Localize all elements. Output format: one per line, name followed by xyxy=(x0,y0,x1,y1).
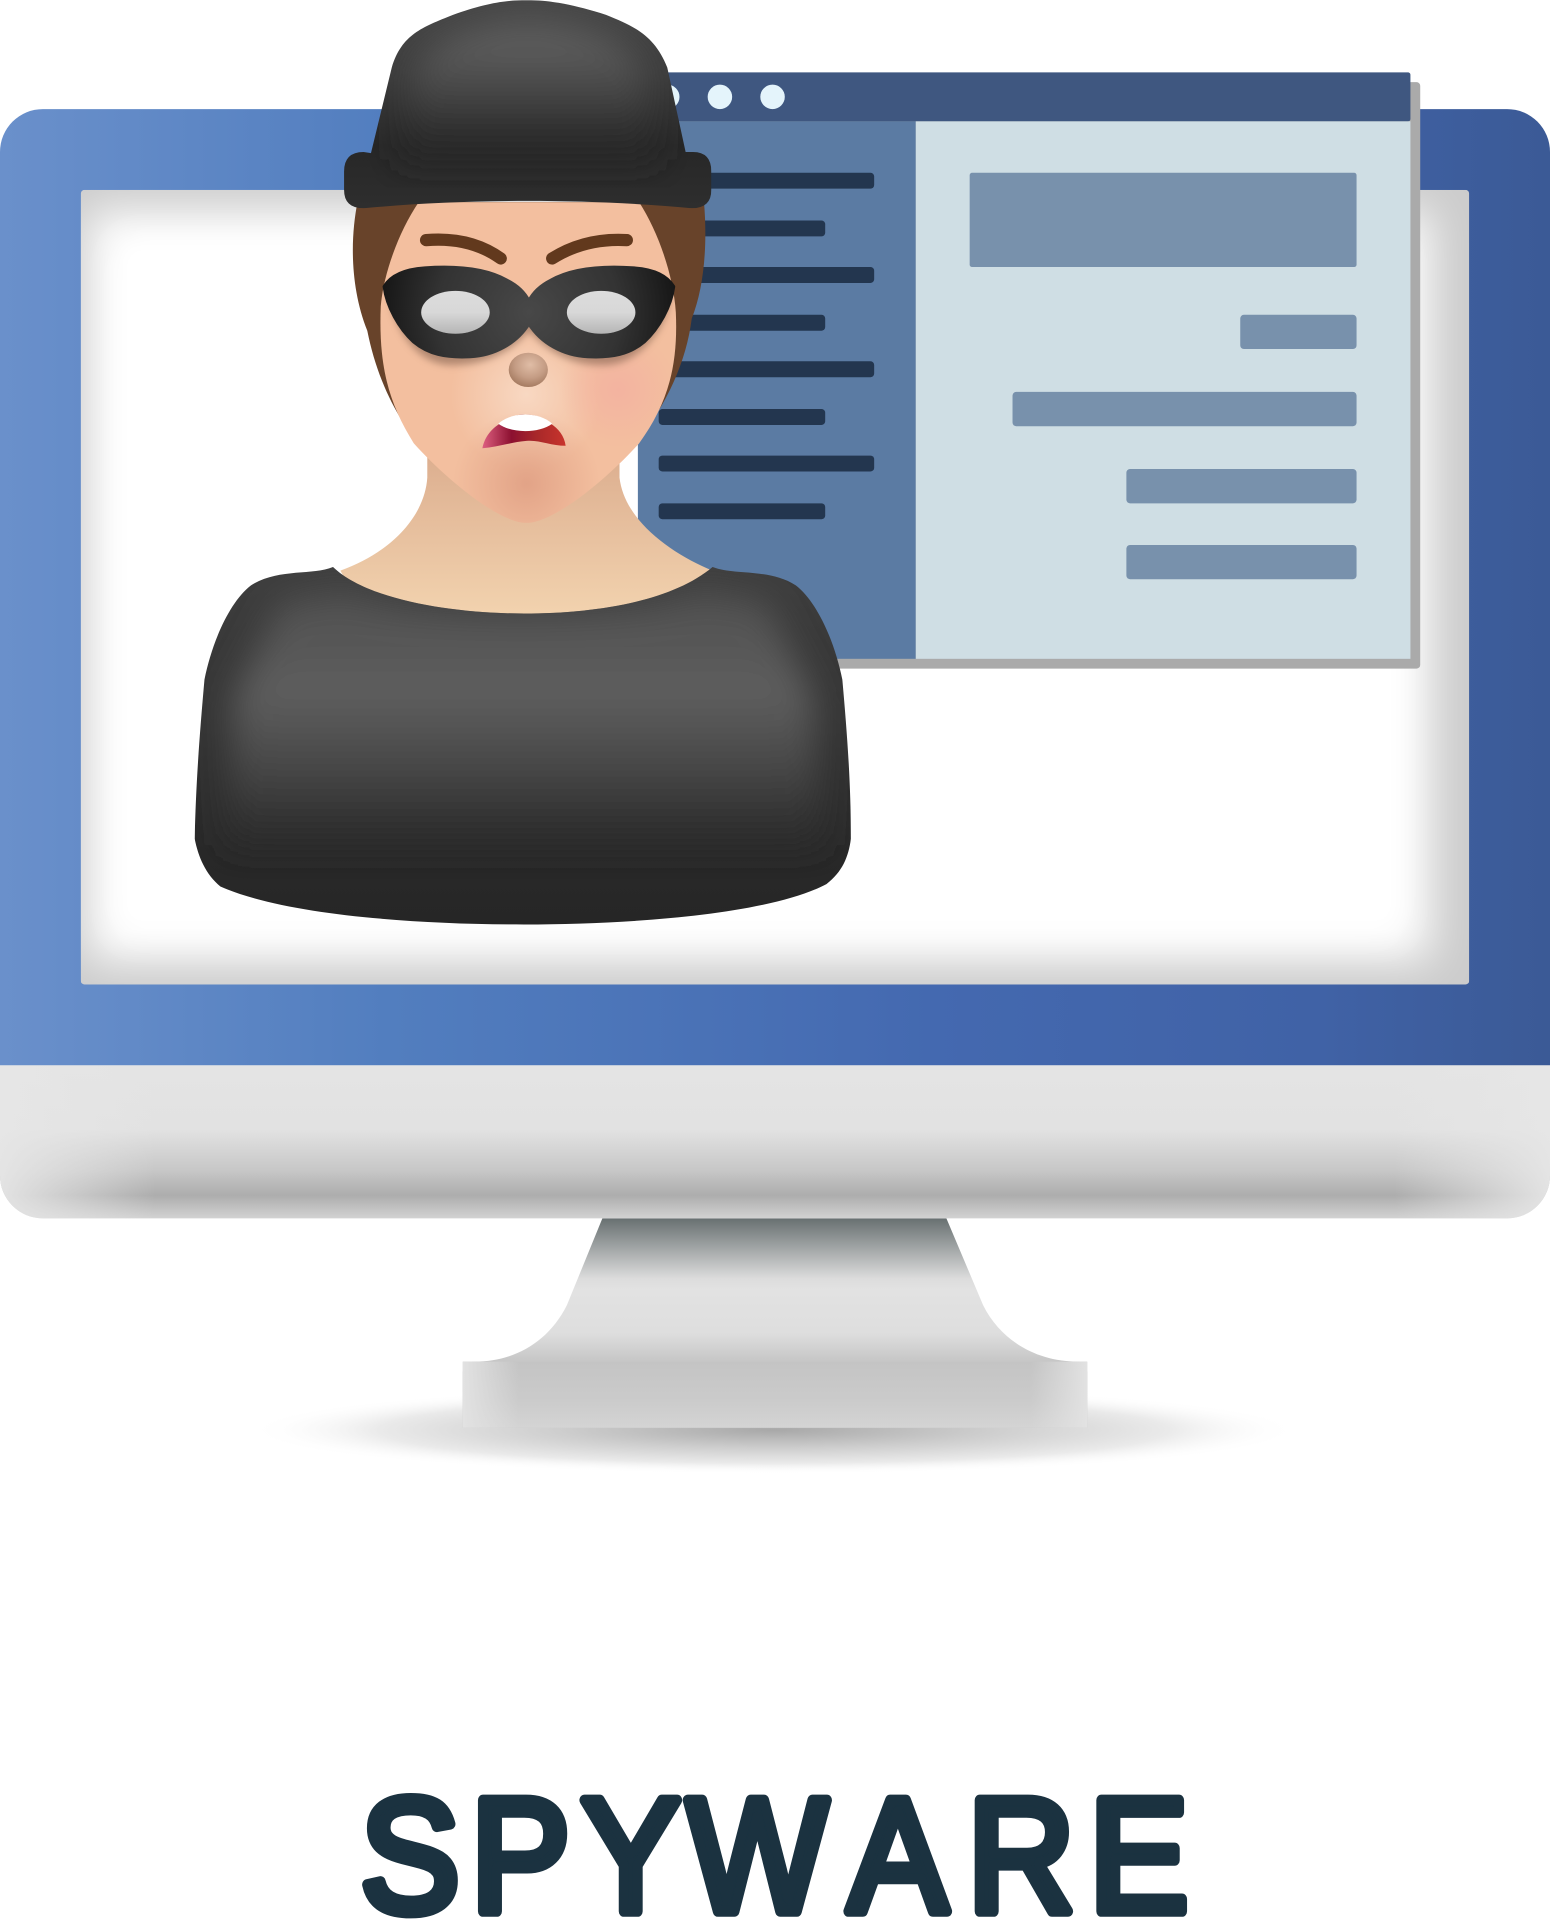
monitor screen xyxy=(81,190,1469,984)
icon: desktop monitor xyxy=(0,109,1550,1474)
floor shadow xyxy=(247,1386,1300,1474)
face xyxy=(380,202,676,522)
monitor silver chin xyxy=(0,1065,1550,1218)
window sidebar xyxy=(638,121,916,659)
window shadow xyxy=(648,82,1420,669)
hair xyxy=(353,202,705,456)
window content pane xyxy=(916,121,1410,659)
mouth xyxy=(482,415,566,448)
left eye hole xyxy=(421,291,490,334)
left eyebrow xyxy=(426,240,501,258)
torso xyxy=(184,557,863,937)
neck xyxy=(340,441,713,618)
right eyebrow xyxy=(552,240,627,258)
browser window xyxy=(638,72,1420,669)
burglar mask xyxy=(384,268,673,357)
window dots xyxy=(655,85,785,109)
right eye hole xyxy=(567,291,635,334)
hat xyxy=(337,0,719,214)
monitor stand xyxy=(463,1218,1087,1428)
nose xyxy=(509,353,548,387)
icon: spy figure xyxy=(184,0,863,937)
monitor blue bezel xyxy=(0,109,1550,1065)
window title bar xyxy=(638,72,1410,121)
mask shadow xyxy=(389,282,671,365)
